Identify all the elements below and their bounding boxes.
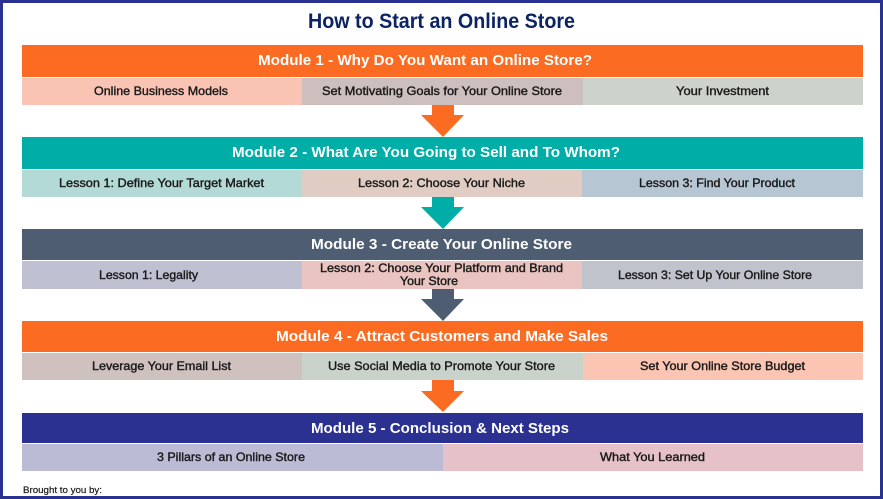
arrow: module 2 to 3 <box>421 197 464 229</box>
lesson: motivating goals <box>302 78 583 105</box>
lesson: social media: Use Social Media to Promote Your Store <box>328 359 555 373</box>
title: How to Start an Online Store <box>308 10 575 33</box>
footer credit: Brought to you by: <box>23 485 102 495</box>
arrow: module 3 to 4 <box>421 289 464 321</box>
lesson: email list: Leverage Your Email List <box>92 359 232 373</box>
panel: module 1 <box>22 45 863 105</box>
panel: module 4 <box>22 321 863 380</box>
lesson: online business models <box>22 78 302 105</box>
lesson: your investment: Your Investment <box>676 84 770 98</box>
panel: module 3 <box>22 229 863 289</box>
lesson: motivating goals: Set Motivating Goals for Your Online Store <box>322 84 562 98</box>
module 5 heading: Module 5 - Conclusion & Next Steps <box>311 420 569 437</box>
lesson: three pillars <box>22 444 443 471</box>
lesson: find your product: Lesson 3: Find Your Product <box>639 176 796 190</box>
module 3 heading <box>22 229 863 260</box>
lesson: online business models: Online Business Models <box>94 84 228 98</box>
lesson: find your product <box>582 170 863 197</box>
module 4 heading <box>22 321 863 352</box>
lesson: what you learned: What You Learned <box>600 450 705 464</box>
lesson: legality: Lesson 1: Legality <box>99 268 198 282</box>
arrow: module 4 to 5 <box>421 380 464 412</box>
lesson: choose your niche <box>302 170 583 197</box>
lesson: platform and brand: Your Store <box>400 274 458 288</box>
module 2 heading: Module 2 - What Are You Going to Sell and To Whom? <box>232 144 620 161</box>
lesson: platform and brand <box>302 261 582 289</box>
module 1 heading <box>22 45 863 77</box>
lesson: set up your store: Lesson 3: Set Up Your Online Store <box>618 268 812 282</box>
lesson: what you learned <box>443 444 863 471</box>
module 1 heading: Module 1 - Why Do You Want an Online Store? <box>258 52 592 69</box>
lesson: platform and brand: Lesson 2: Choose Your Platform and Brand <box>320 261 563 275</box>
lesson: set up your store <box>582 261 863 289</box>
lesson: legality <box>22 261 302 289</box>
module 3 heading: Module 3 - Create Your Online Store <box>311 236 572 253</box>
lesson: three pillars: 3 Pillars of an Online Store <box>157 450 305 464</box>
lesson: target market: Lesson 1: Define Your Target Market <box>59 176 265 190</box>
lesson: choose your niche: Lesson 2: Choose Your Niche <box>358 176 525 190</box>
lesson: social media <box>302 353 583 380</box>
module 2 heading <box>22 137 863 169</box>
lesson: email list <box>22 353 302 380</box>
module 4 heading: Module 4 - Attract Customers and Make Sales <box>276 328 608 345</box>
lesson: your investment <box>583 78 863 105</box>
module 5 heading <box>22 413 863 443</box>
panel: module 2 <box>22 137 863 197</box>
lesson: store budget: Set Your Online Store Budget <box>640 359 806 373</box>
lesson: store budget <box>583 353 863 380</box>
lesson: target market <box>22 170 302 197</box>
arrow: module 1 to 2 <box>421 105 464 137</box>
panel: module 5 <box>22 413 863 471</box>
